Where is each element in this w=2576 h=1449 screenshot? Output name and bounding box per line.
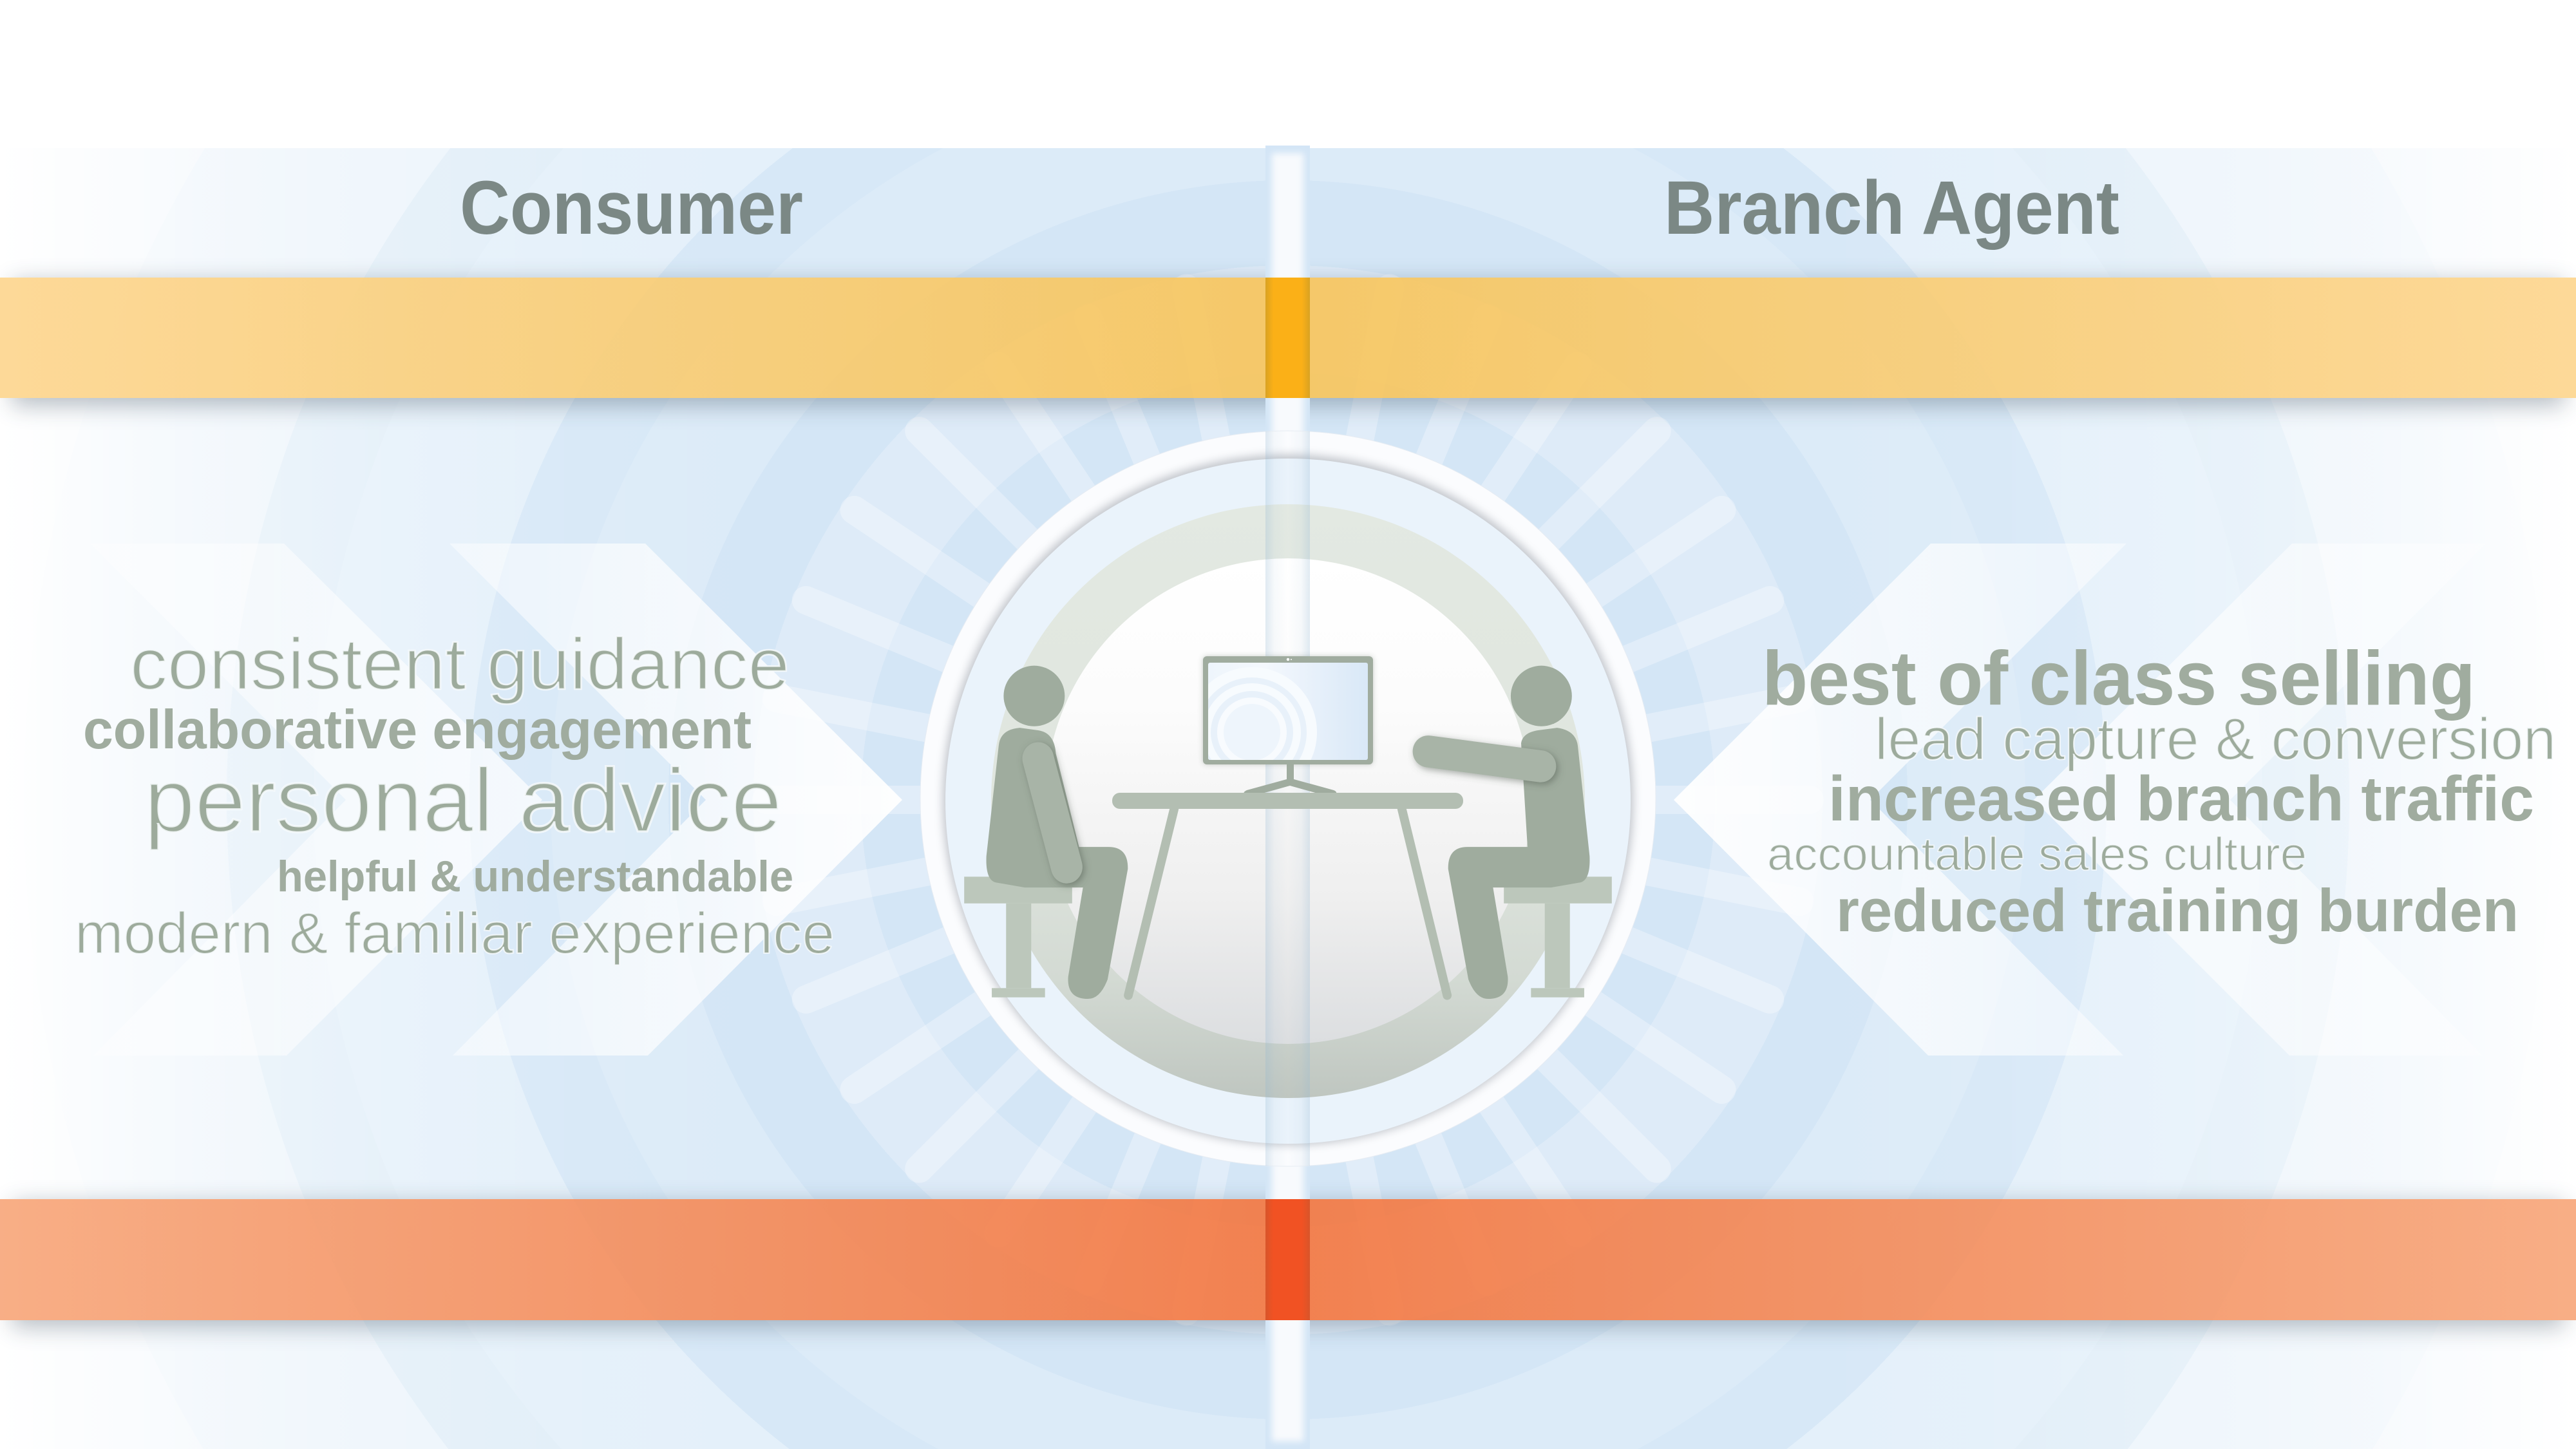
left chevrons: [90, 544, 902, 1056]
branch agent word cloud: increased branch traffic: [1828, 763, 2534, 834]
consumer word cloud: collaborative engagement: [83, 699, 752, 761]
left stool: [964, 876, 1072, 998]
right chevrons: [1674, 544, 2486, 1056]
vertical centre bar: [1265, 146, 1310, 1449]
branch agent word cloud: accountable sales culture: [1767, 829, 2307, 880]
sage ring: [991, 504, 1585, 1098]
illustration: consumer and agent at desk: [964, 656, 1612, 999]
consumer figure: [986, 666, 1128, 999]
agent figure: [1428, 666, 1589, 999]
consumer word cloud: [75, 623, 835, 966]
desk: [1112, 793, 1463, 995]
radiating light rays: [766, 278, 1810, 1321]
inner disc shadow: [943, 455, 1633, 1145]
outer white ring: [920, 431, 1656, 1166]
heading: Consumer: Consumer: [460, 166, 803, 251]
central circle emblem: [920, 431, 1656, 1166]
orange band: [0, 1199, 2576, 1320]
inner pale disc: [945, 459, 1631, 1144]
monitor: [1187, 656, 1373, 797]
consumer word cloud: helpful & understandable: [277, 852, 793, 901]
branch agent word cloud: best of class selling: [1762, 636, 2476, 721]
branch agent word cloud: lead capture & conversion: [1875, 706, 2556, 772]
heading: Branch Agent: Branch Agent: [1664, 166, 2119, 251]
band shadows: [12, 283, 2564, 1327]
branch agent word cloud: [1762, 636, 2556, 944]
white core: [1045, 558, 1531, 1044]
consumer word cloud: modern & familiar experience: [75, 902, 835, 966]
branch agent word cloud: reduced training burden: [1836, 876, 2519, 944]
yellow band: [0, 278, 2576, 398]
right stool: [1504, 876, 1612, 998]
centre bar overlay on circle: [1265, 431, 1310, 1166]
consumer word cloud: personal advice: [144, 750, 782, 851]
consumer word cloud: consistent guidance: [130, 623, 790, 705]
